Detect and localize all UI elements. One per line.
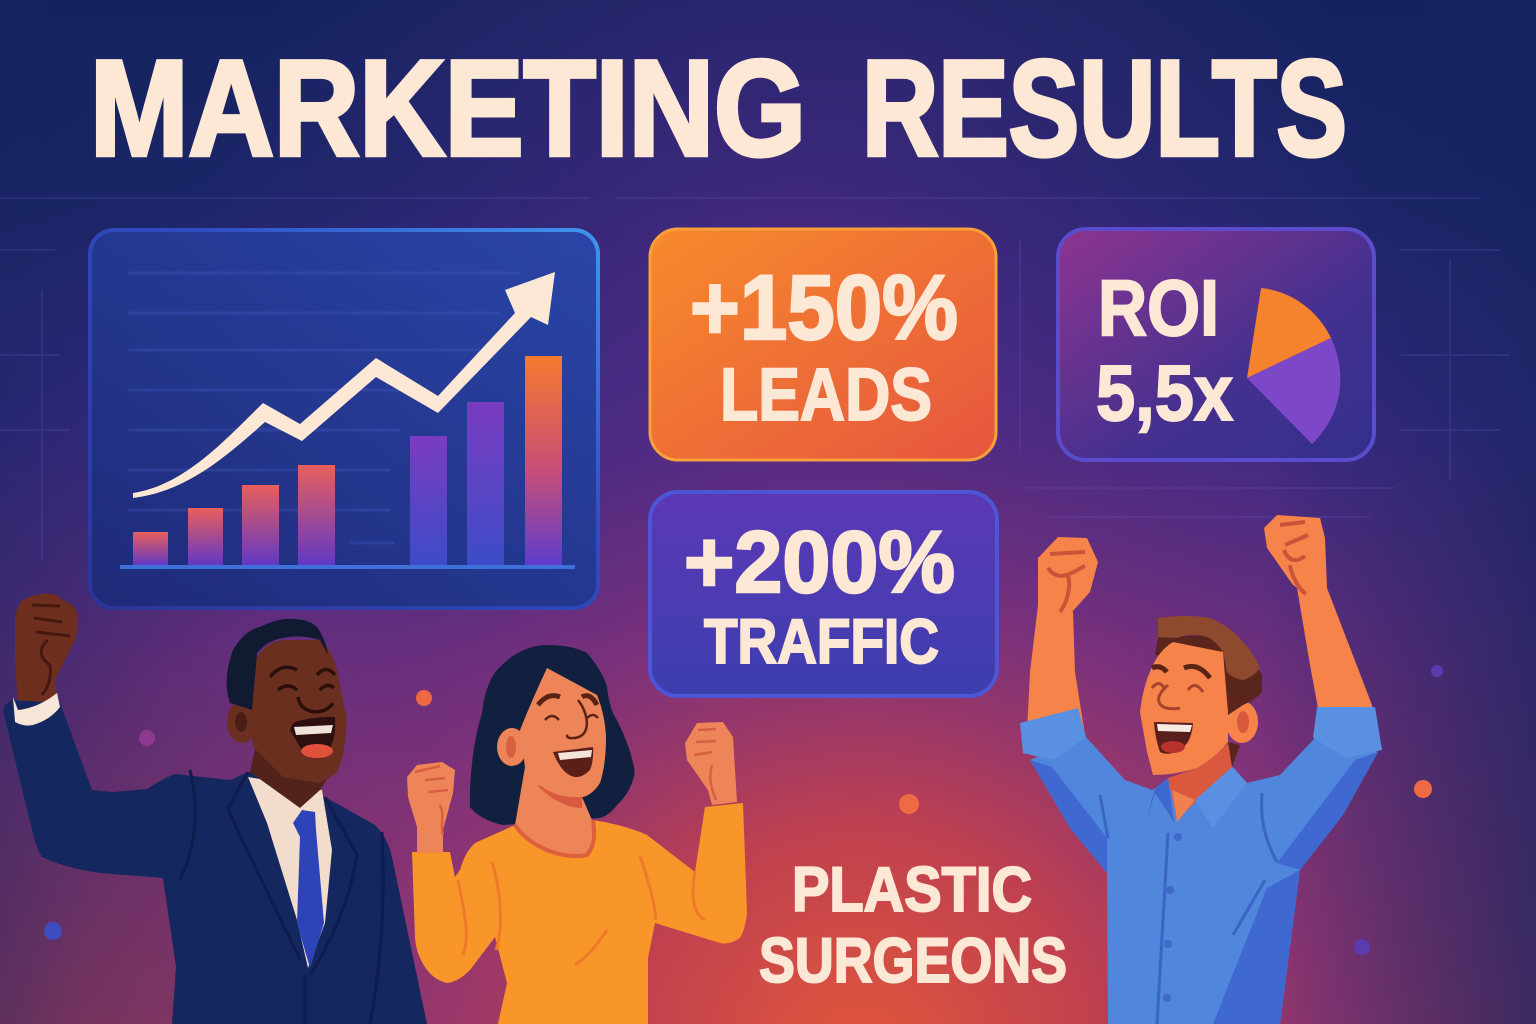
pie chart [1247, 288, 1340, 444]
collar [1146, 778, 1174, 822]
ear [1226, 701, 1258, 743]
right fist [685, 722, 737, 805]
panel: traffic stat: TRAFFIC [704, 607, 939, 677]
panel: traffic stat [650, 492, 997, 696]
mouth [290, 717, 335, 758]
buttons [1163, 833, 1182, 1002]
fist [15, 594, 78, 710]
hair [470, 645, 634, 825]
cuffs [1020, 708, 1086, 760]
cuff [13, 693, 60, 726]
panel: leads stat [650, 229, 996, 460]
bar chart [120, 356, 575, 569]
neck [1168, 742, 1232, 820]
decorative dots [44, 665, 1443, 955]
left arm [1027, 605, 1085, 735]
title [90, 32, 1347, 184]
title: RESULTS [862, 32, 1347, 184]
face [520, 668, 606, 797]
person: man in blue shirt [1020, 515, 1382, 1024]
panel: leads stat: +150% [690, 257, 958, 359]
label: plastic surgeons: PLASTIC [792, 855, 1032, 925]
mouth [553, 747, 593, 777]
face details [538, 696, 597, 705]
neck [250, 740, 340, 808]
panel: ROI stat: ROI [1098, 263, 1219, 352]
left fist [407, 762, 455, 853]
sweater [412, 803, 747, 1024]
suit jacket [3, 700, 427, 1024]
panel: growth chart [90, 230, 598, 608]
face details [1152, 666, 1210, 678]
panel: traffic stat: +200% [684, 514, 955, 611]
label: plastic surgeons: SURGEONS [759, 926, 1067, 996]
head [248, 640, 347, 783]
hair top [1158, 616, 1260, 680]
panel: ROI stat: 5,5x [1096, 348, 1233, 437]
arrow: upward trend [133, 272, 555, 498]
tie [293, 810, 324, 968]
mouth [1154, 722, 1193, 754]
label: plastic surgeons [759, 855, 1067, 996]
panel: ROI stat [1058, 229, 1374, 460]
neck [515, 767, 595, 855]
lapel lines [180, 770, 383, 1024]
face details [270, 667, 335, 712]
person: woman in orange sweater [407, 645, 747, 1024]
title: MARKETING [90, 32, 806, 184]
hair back [1155, 635, 1262, 715]
shirt [248, 777, 332, 968]
shirt [1030, 737, 1378, 1024]
person: man in suit [3, 594, 427, 1024]
panel: leads stat: LEADS [720, 353, 932, 436]
hair [227, 619, 328, 710]
face [1140, 642, 1228, 775]
right arm [1297, 588, 1373, 718]
